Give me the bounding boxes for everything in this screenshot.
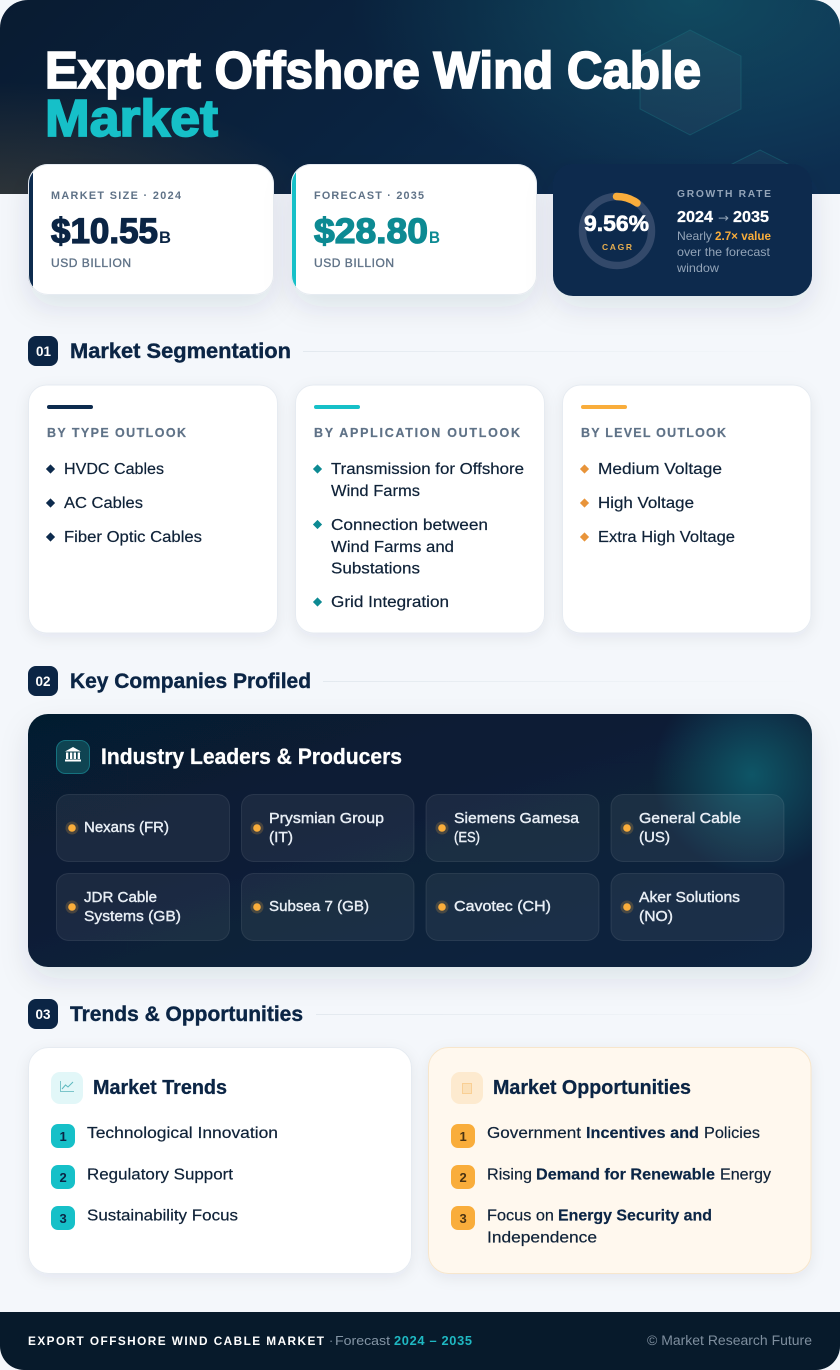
footer: © Market Research Future [647,1333,812,1348]
list items: HVDC Cables [64,461,164,478]
section heading 02: 02 [36,674,50,689]
footer: EXPORT OFFSHORE WIND CABLE MARKET [28,1334,325,1348]
company chips: Systems (GB) [84,908,181,925]
numbered list: Policies [704,1125,760,1142]
list items: Wind Farms [331,483,420,500]
numbered list: Incentives and [586,1125,699,1142]
numbered list: Demand for Renewable [536,1166,715,1184]
icon: bank [56,740,90,774]
list items: Transmission for Offshore [331,461,524,478]
title: Export Offshore Wind Cable [45,42,701,100]
icon: line chart [51,1072,83,1104]
panel: by application outlook [296,385,544,633]
stat card: growth rate: 2024 [677,209,713,226]
numbered list: Energy Security and [558,1208,712,1224]
stat card: forecast 2035: B [429,228,440,247]
title [45,42,701,148]
list items [580,461,735,546]
numbered list: Government [487,1125,582,1142]
panel: by level outlook: BY LEVEL OUTLOOK [581,426,726,440]
section heading 02 [28,666,812,696]
stat card: forecast 2035 [291,164,537,295]
section heading 03: 03 [36,1007,51,1022]
panel heading: Industry Leaders & Producers [101,744,402,769]
title: Market [45,90,218,148]
footer: 2024 – 2035 [394,1333,472,1348]
section heading 03: Trends & Opportunities [70,1003,303,1026]
numbered list: Regulatory Support [87,1166,234,1184]
numbered list: Sustainability Focus [87,1208,238,1224]
list items: Medium Voltage [598,461,722,478]
numbered list: Technological Innovation [87,1125,278,1142]
decorative hexagon small [730,150,790,194]
list items: AC Cables [64,495,143,512]
list items: Connection between [331,517,488,534]
panel: market opportunities: Market Opportunities [493,1077,691,1099]
section heading 01 [28,336,812,366]
stat card: growth rate: → [718,211,729,225]
numbered list: 1 [60,1129,67,1144]
list items: Extra High Voltage [598,529,735,546]
section heading 01: Market Segmentation [70,340,291,363]
numbered list: 2 [60,1170,67,1185]
header banner [0,0,840,194]
CAGR ring [582,196,652,266]
list items: Fiber Optic Cables [64,529,202,546]
CAGR ring: CAGR [602,242,632,252]
company chips: Siemens Gamesa [454,810,580,827]
stat card: forecast 2035: FORECAST · 2035 [314,190,424,202]
stat card: forecast 2035: $28.80 [314,212,428,251]
stat card: growth rate: 2.7× value [715,229,771,243]
numbered list: Independence [487,1230,597,1246]
list items: High Voltage [598,495,694,512]
numbered list: Energy [720,1166,771,1184]
company chips: (NO) [639,908,673,925]
panel: by application outlook: BY APPLICATION OUTLOOK [314,426,520,440]
company chips: General Cable [639,810,741,827]
numbered list: 2 [460,1170,467,1185]
company chips: JDR Cable [84,889,157,906]
panel: by type outlook [28,385,278,633]
stat card: growth rate: window [676,261,719,275]
company chips: (IT) [269,829,293,846]
footer [0,1312,840,1370]
list items: Wind Farms and [331,539,454,556]
stat card: growth rate: GROWTH RATE [677,189,771,200]
company chips [56,794,784,940]
section heading 03 [28,999,812,1029]
stat card: growth rate: 2035 [733,209,769,226]
stat card: market size 2024: $10.55 [51,212,158,251]
decorative hexagon large [640,30,741,135]
company chips: Aker Solutions [639,889,740,906]
company chips: Nexans (FR) [84,819,169,836]
list items: Substations [331,560,420,578]
numbered list: 1 [460,1129,467,1144]
footer: · [329,1334,333,1348]
stat card: forecast 2035: USD BILLION [314,256,394,270]
panel: market opportunities [428,1048,811,1274]
company chips: (ES) [454,829,480,846]
numbered list: Focus on [487,1208,554,1224]
stat card: market size 2024: B [159,228,171,247]
icon: opportunity placeholder [451,1072,483,1104]
company chips: (US) [639,829,670,846]
CAGR ring: 9.56% [584,211,649,236]
stat card: growth rate [553,164,812,296]
numbered list [451,1124,771,1246]
section heading 02: Key Companies Profiled [70,670,311,693]
company chips: Cavotec (CH) [454,898,551,915]
footer: Forecast [335,1333,390,1348]
numbered list: 3 [460,1211,467,1226]
stat card: growth rate: over the forecast [677,245,771,259]
stat card: growth rate: Nearly [677,229,712,243]
numbered list [51,1124,278,1230]
company chips: Subsea 7 (GB) [269,898,369,915]
panel: by type outlook: BY TYPE OUTLOOK [47,426,186,440]
panel: market trends: Market Trends [93,1077,227,1099]
list items [46,461,202,546]
stat card: market size 2024: USD BILLION [51,256,131,270]
stat card: market size 2024 [28,164,274,295]
list items: Grid Integration [331,594,449,611]
numbered list: Rising [487,1166,532,1184]
list items [313,461,524,611]
stat card: market size 2024: MARKET SIZE · 2024 [51,190,181,202]
numbered list: 3 [60,1211,67,1226]
section heading 01: 01 [36,344,51,359]
panel: by level outlook [562,385,811,633]
company chips: Prysmian Group [269,810,384,827]
panel: market trends [28,1048,412,1274]
panel: key companies [28,714,812,967]
